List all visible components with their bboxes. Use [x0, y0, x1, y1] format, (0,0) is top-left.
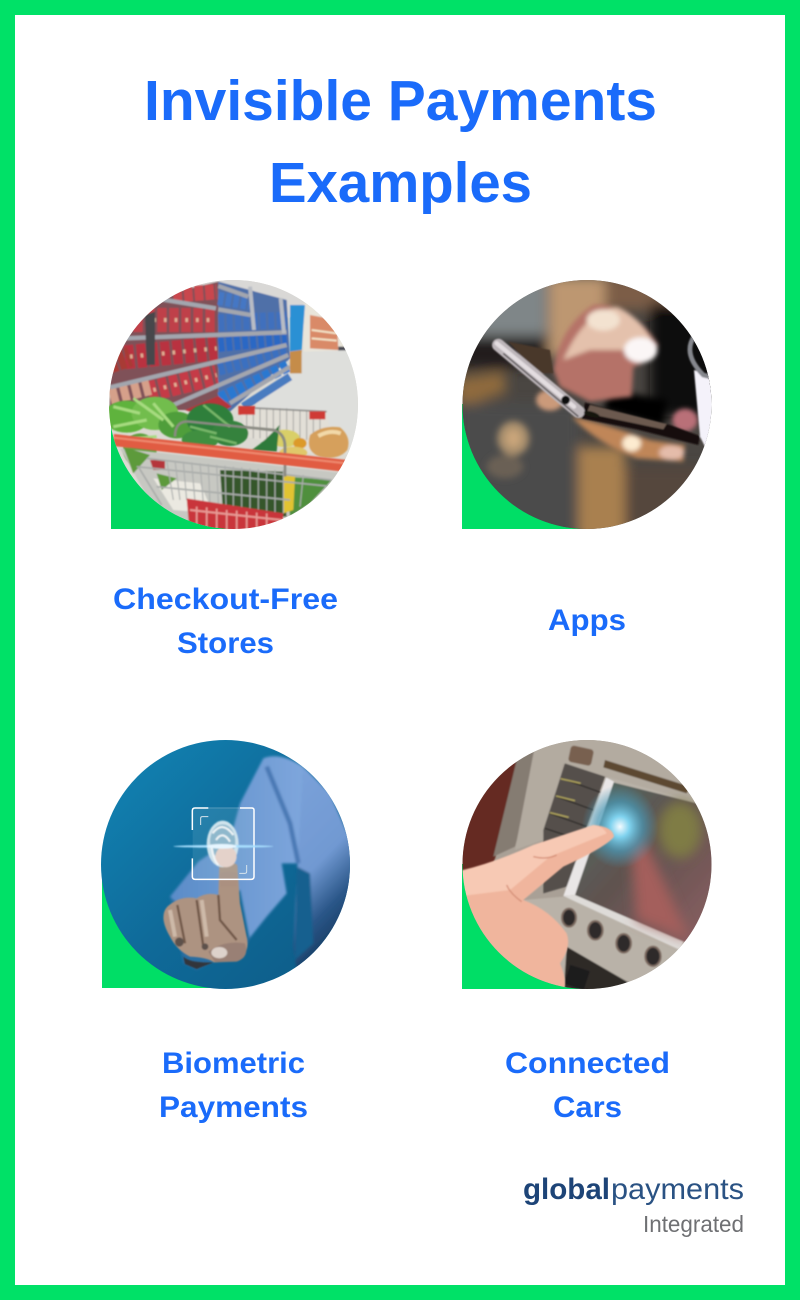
green corner accent: [462, 404, 587, 529]
photo: finger touching fingerprint scanner: [97, 737, 357, 997]
photo: shopping cart in supermarket aisle: [103, 277, 363, 541]
label: apps: Apps: [548, 604, 626, 637]
label: connected cars: Cars: [553, 1091, 622, 1124]
photo: hand holding smartphone: [462, 280, 712, 529]
screen glow: [582, 785, 658, 868]
shelf edges: [110, 286, 290, 405]
label: biometric payments: [159, 1047, 308, 1124]
logo: global payments integrated: global: [523, 1173, 610, 1206]
label: checkout-free stores: [113, 583, 338, 660]
leaves: [103, 401, 150, 433]
panel: checkout-free stores: [103, 277, 363, 660]
panel: connected cars: [457, 737, 717, 1124]
photo: finger touching car dashboard screen: [457, 737, 717, 997]
green corner accent: [102, 864, 226, 988]
title: Invisible Payments: [144, 69, 657, 133]
green corner accent: [111, 404, 234, 529]
title: Examples: [269, 151, 532, 215]
label: connected cars: [505, 1047, 670, 1124]
label: checkout-free stores: Stores: [177, 627, 274, 660]
title: [144, 69, 657, 215]
label: checkout-free stores: Checkout-Free: [113, 583, 338, 616]
logo: global payments integrated: payments: [611, 1173, 744, 1206]
panel: biometric payments: [97, 737, 357, 1124]
logo: global payments integrated: [523, 1173, 744, 1237]
label: biometric payments: Payments: [159, 1091, 308, 1124]
label: biometric payments: Biometric: [162, 1047, 305, 1080]
logo: global payments integrated: Integrated: [643, 1211, 744, 1237]
label: connected cars: Connected: [505, 1047, 670, 1080]
product rows: [132, 307, 216, 333]
panel: apps: [457, 277, 723, 637]
fingerprint scanner frame: [173, 808, 273, 879]
green corner accent: [462, 864, 587, 989]
